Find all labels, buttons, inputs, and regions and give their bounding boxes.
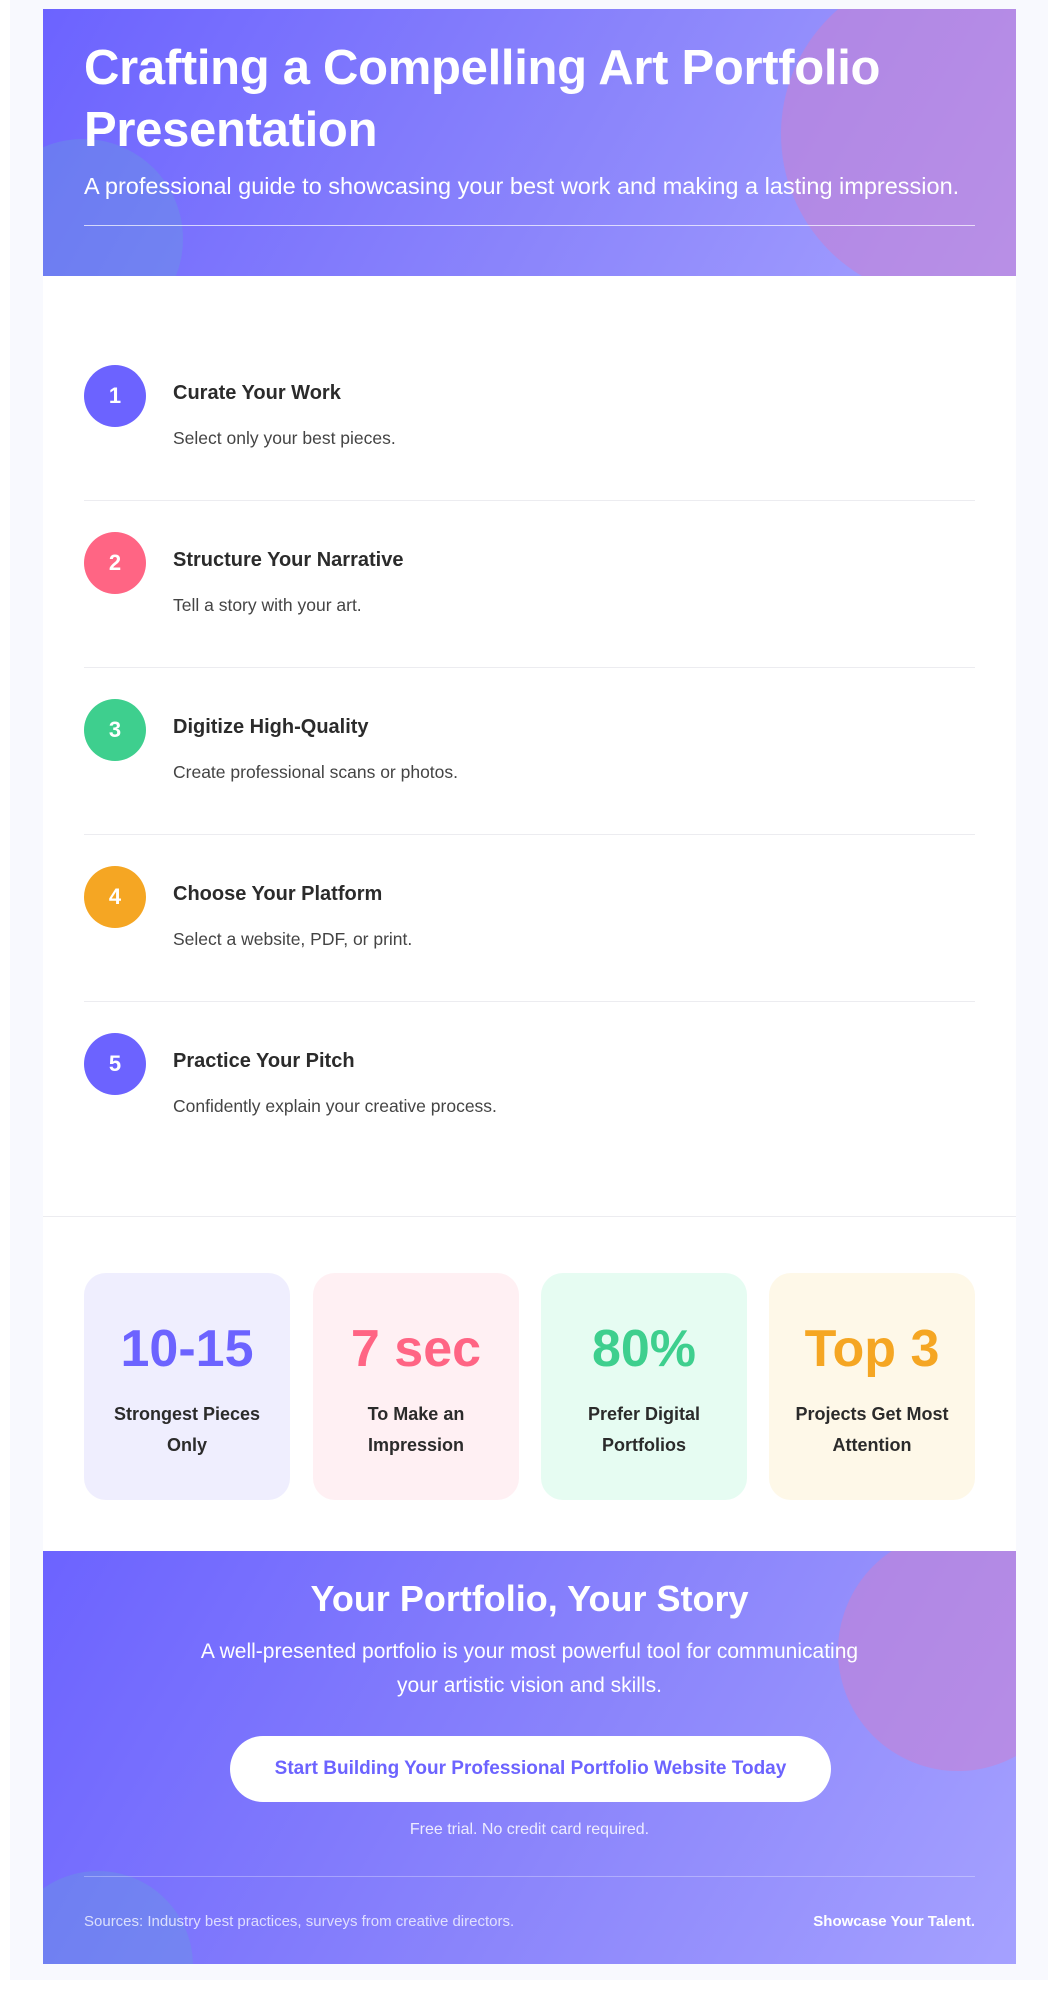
icon: number 2: 2 [109, 550, 121, 575]
icon: number 2 [84, 532, 146, 594]
step 3 [84, 699, 458, 782]
step 5: Practice Your Pitch [173, 1050, 355, 1072]
header panel [43, 9, 1016, 276]
step 2 [84, 532, 403, 615]
step 3: Create professional scans or photos. [173, 762, 458, 782]
icon: number 5: 5 [109, 1051, 121, 1076]
step 4: Select a website, PDF, or print. [173, 929, 412, 949]
stat card 3 [541, 1273, 747, 1500]
stat card 2: 7 sec [351, 1320, 481, 1378]
icon: number 4: 4 [109, 884, 121, 909]
step 1 [84, 365, 396, 448]
stat card 2: To Make an Impression [368, 1404, 464, 1455]
sources: Sources: Industry best practices, surveys from creative directors. [84, 1913, 514, 1930]
step 2: Structure Your Narrative [173, 549, 403, 571]
step 5: Confidently explain your creative process. [173, 1096, 497, 1116]
tagline: Showcase Your Talent. [813, 1913, 975, 1930]
stat card 3: Prefer Digital Portfolios [588, 1404, 700, 1455]
icon: number 5 [84, 1033, 146, 1095]
stat card 1 [84, 1273, 290, 1500]
icon: number 1 [84, 365, 146, 427]
icon: number 4 [84, 866, 146, 928]
step 1: Curate Your Work [173, 382, 341, 404]
stat card 4 [769, 1273, 975, 1500]
step 5 [84, 1033, 497, 1116]
stat card 2 [313, 1273, 519, 1500]
step 3: Digitize High-Quality [173, 716, 369, 738]
CTA panel [43, 1551, 1016, 1964]
stat card 4: Projects Get Most Attention [795, 1404, 949, 1455]
step 4: Choose Your Platform [173, 883, 382, 905]
stat card 1: 10-15 [120, 1320, 254, 1378]
CTA button [230, 1736, 831, 1802]
CTA heading: Your Portfolio, Your Story [310, 1578, 748, 1619]
stat card 4: Top 3 [805, 1320, 939, 1378]
icon: number 3 [84, 699, 146, 761]
icon: number 1: 1 [109, 383, 121, 408]
CTA text: A well-presented portfolio is your most powerful tool for communicating your artistic vision and skills. [201, 1640, 858, 1697]
CTA button: Start Building Your Professional Portfolio Website Today [275, 1758, 786, 1779]
stat card 3: 80% [592, 1320, 696, 1378]
step 1: Select only your best pieces. [173, 428, 396, 448]
step 2: Tell a story with your art. [173, 595, 362, 615]
note: Free trial. No credit card required. [410, 1821, 649, 1838]
title: Crafting a Compelling Art Portfolio Presentation [84, 41, 880, 157]
subtitle: A professional guide to showcasing your best work and making a lasting impression. [84, 173, 959, 199]
stat card 1: Strongest Pieces Only [114, 1404, 260, 1455]
step 4 [84, 866, 412, 949]
icon: number 3: 3 [109, 717, 121, 742]
